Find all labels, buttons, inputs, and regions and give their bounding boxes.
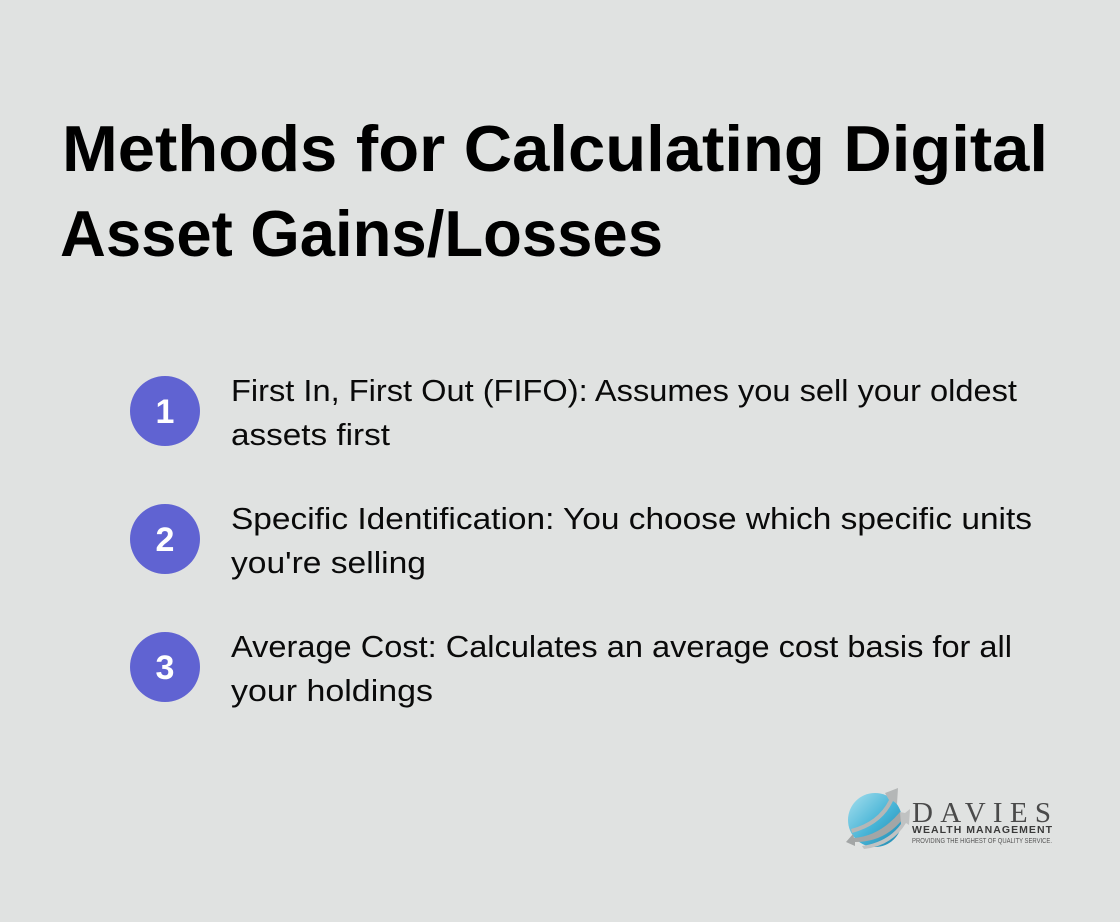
list item 1: [130, 373, 1017, 452]
logo wordmark: DAVIES: [912, 797, 1051, 829]
item 2 text: [231, 501, 1032, 580]
item 2 text: Specific Identification: You choose which specific units: [231, 501, 1032, 536]
item 3 text: Average Cost: Calculates an average cost basis for all: [231, 629, 1012, 664]
item 3 text: your holdings: [231, 673, 433, 708]
item 2 text: you're selling: [231, 545, 426, 580]
title: [60, 112, 1048, 270]
list item 3: [130, 629, 1012, 708]
logo tagline: PROVIDING THE HIGHEST OF QUALITY SERVICE.: [912, 836, 1052, 845]
number badge 2: 2: [156, 521, 174, 559]
item 1 text: First In, First Out (FIFO): Assumes you sell your oldest: [231, 373, 1017, 408]
logo subtitle: WEALTH MANAGEMENT: [912, 824, 1053, 836]
icon: globe with arrows: [846, 788, 910, 849]
number badge 2: [130, 504, 200, 574]
item 3 text: [231, 629, 1012, 708]
item 1 text: [231, 373, 1017, 452]
logo: Davies Wealth Management: [846, 788, 1053, 849]
number badge 3: 3: [156, 649, 174, 687]
title: Methods for Calculating Digital: [62, 112, 1048, 185]
number badge 1: [130, 376, 200, 446]
list item 2: [130, 501, 1032, 580]
item 1 text: assets first: [231, 417, 390, 452]
number badge 3: [130, 632, 200, 702]
number badge 1: 1: [156, 393, 174, 431]
title: Asset Gains/Losses: [60, 197, 663, 270]
